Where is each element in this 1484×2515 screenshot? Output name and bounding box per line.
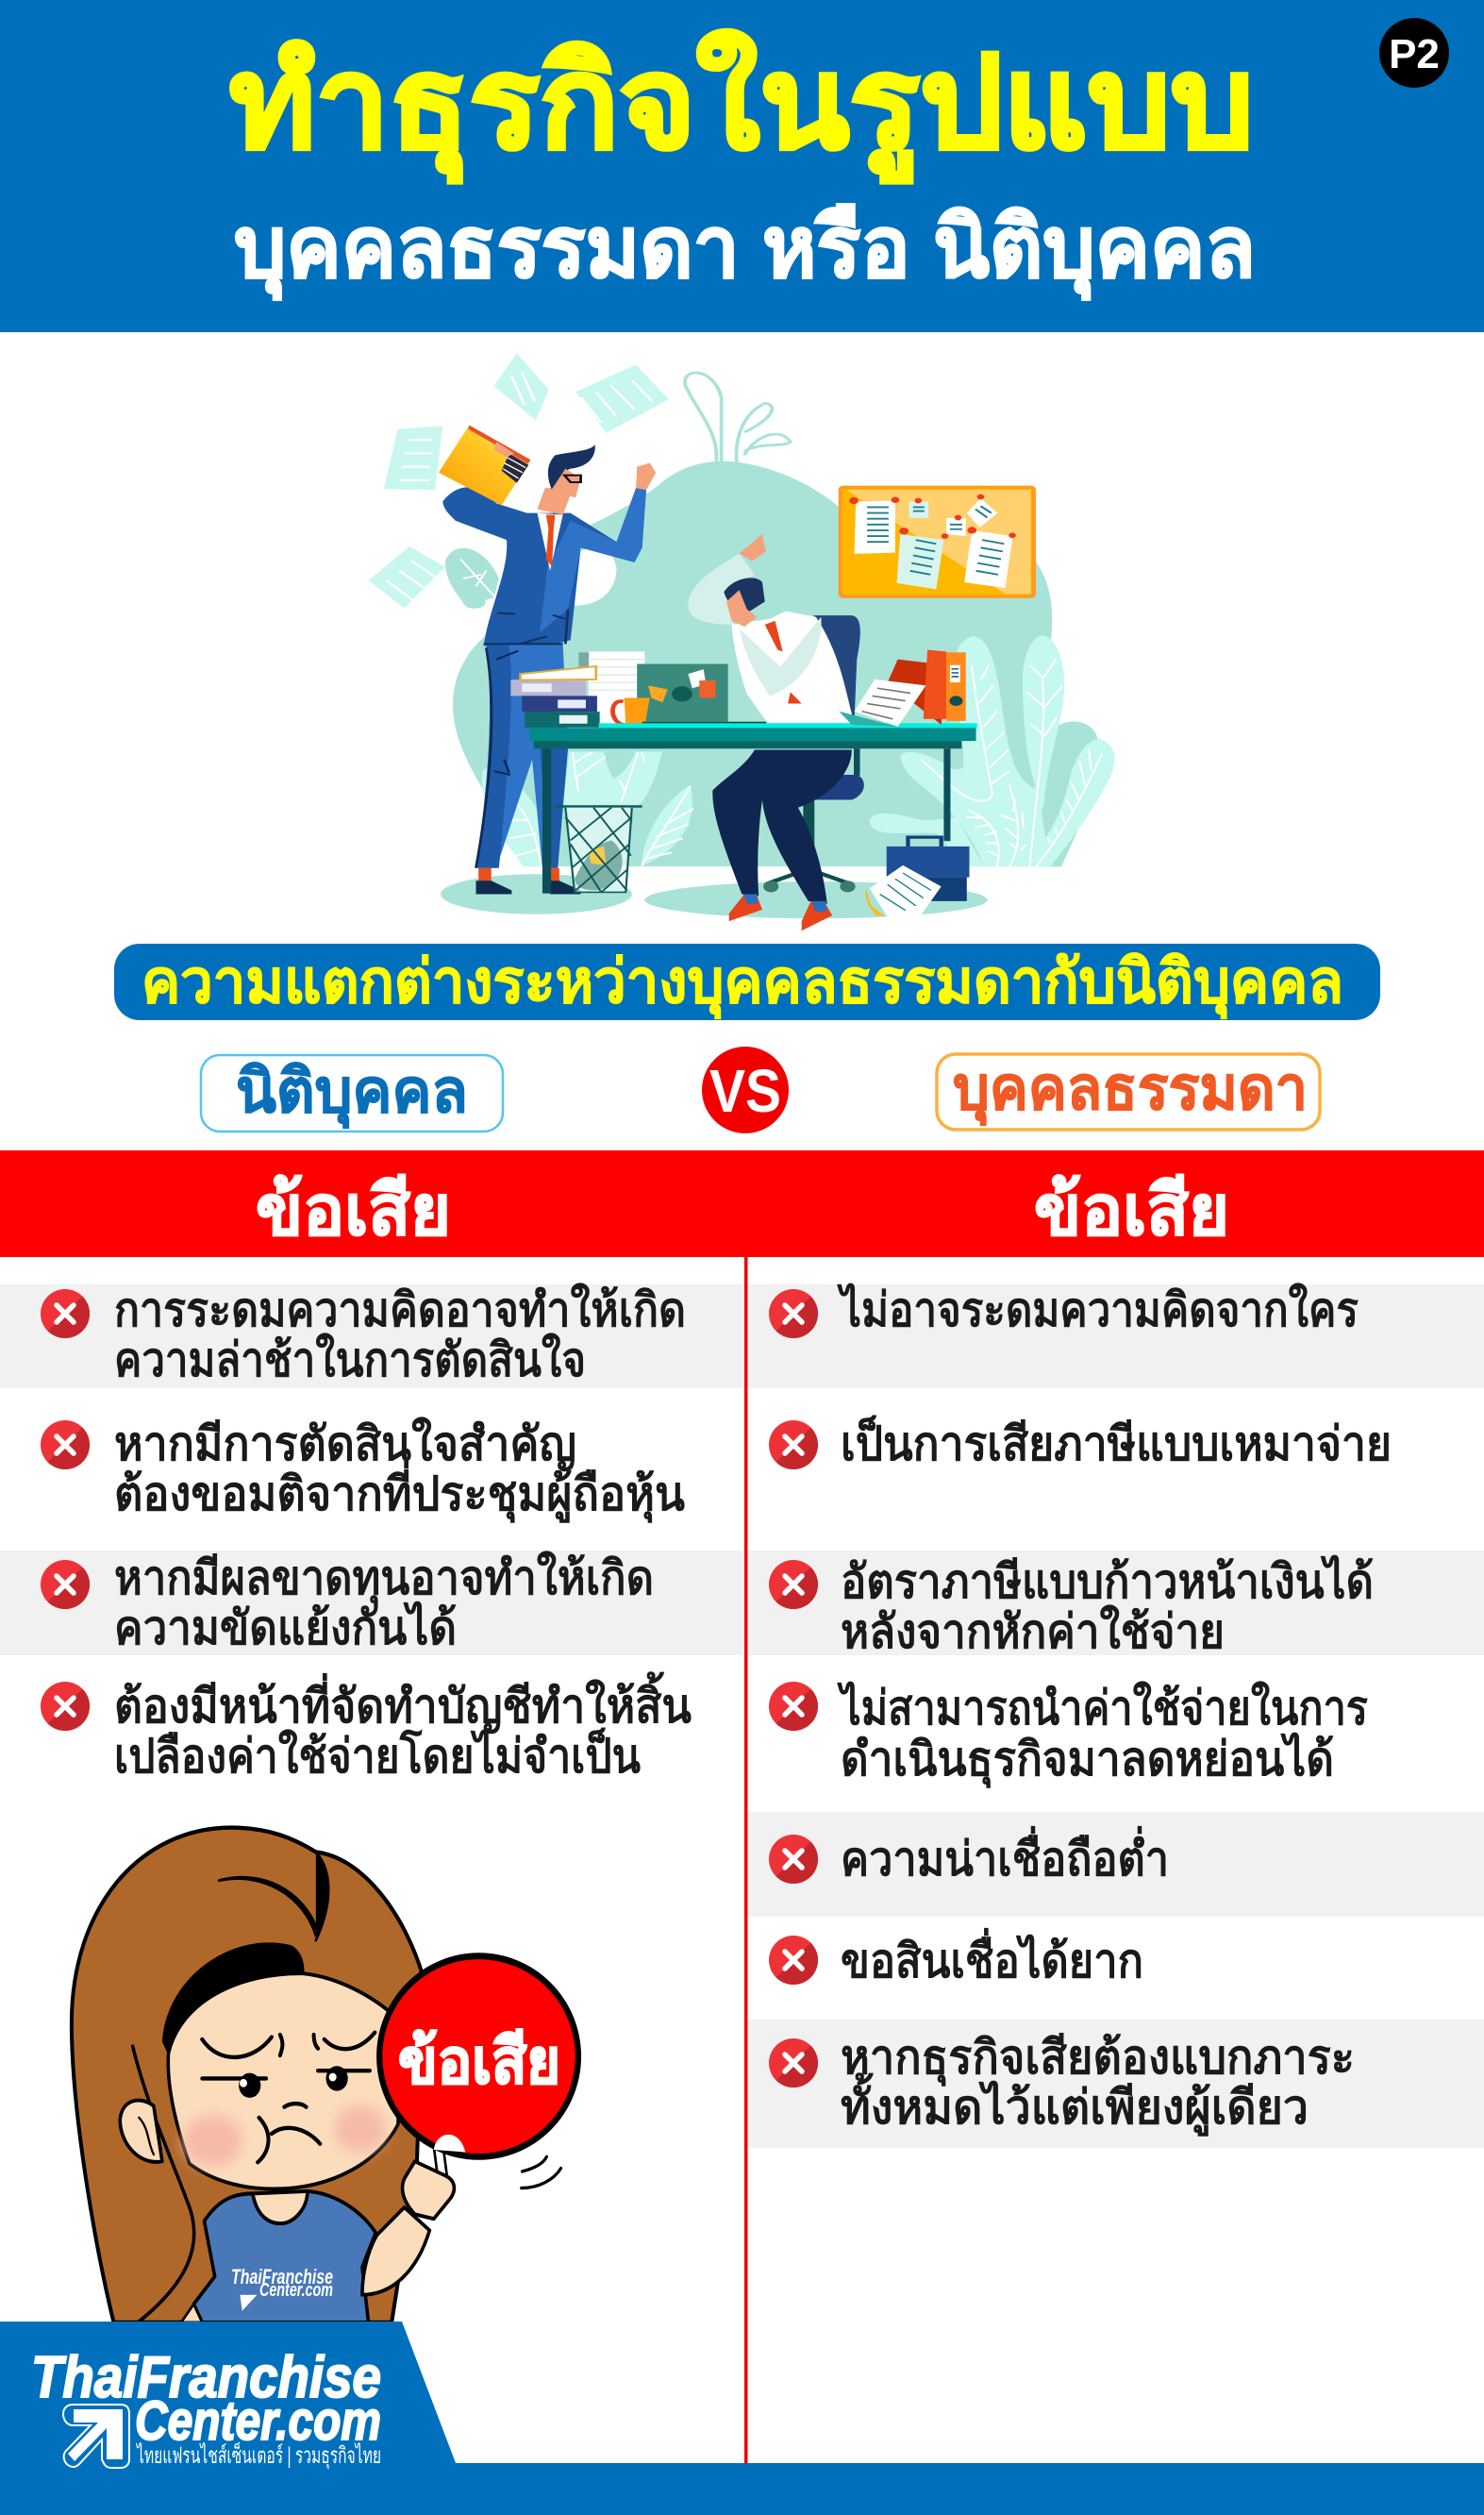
left row 4: ต้องมีหน้าที่จัดทำบัญชีทำให้สิ้น [114, 1671, 692, 1734]
section heading pill: ความแตกต่างระหว่างบุคคลธรรมดากับนิติบุคคล [142, 947, 1343, 1019]
left row 2 [41, 1417, 685, 1523]
open folders and paper [839, 649, 966, 727]
background blob [453, 461, 1061, 866]
left label: นิติบุคคล: นิติบุคคล [236, 1057, 468, 1129]
waste basket [555, 806, 642, 892]
right row 5: ความน่าเชื่อถือต่ำ [841, 1826, 1169, 1886]
desk items [510, 651, 766, 728]
right row 4: ไม่สามารถนำค่าใช้จ่ายในการ [837, 1681, 1368, 1735]
right row 5 [769, 1826, 1169, 1886]
mascot: girl holding sign [72, 1828, 578, 2322]
centre divider [744, 1257, 747, 2463]
left row 3: ความขัดแย้งกันได้ [114, 1601, 457, 1654]
seated man's chair [763, 615, 864, 892]
right row 7 [769, 2031, 1355, 2137]
title: ทำธุรกิจในรูปแบบ [229, 29, 1254, 183]
briefcase [866, 837, 970, 917]
right row 2: เป็นการเสียภาษีแบบเหมาจ่าย [841, 1415, 1392, 1470]
papers [369, 353, 669, 608]
right row 4 [769, 1681, 1368, 1788]
red header band [0, 1150, 1484, 1257]
logo wordmark: ThaiFranchise [31, 2345, 381, 2410]
VS badge: VS [709, 1057, 781, 1125]
left row 4 [41, 1671, 692, 1783]
mascot: girl holding sign: Center.com [259, 2280, 333, 2301]
right row 7: หากธุรกิจเสียต้องแบกภาระ [841, 2031, 1355, 2087]
right row 3: หลังจากหักค่าใช้จ่าย [841, 1604, 1225, 1658]
page badge P2 [1379, 18, 1449, 88]
left row 2: ต้องขอมติจากที่ประชุมผู้ถือหุ้น [114, 1461, 685, 1523]
right row 3 [769, 1554, 1374, 1658]
heading right: ข้อเสีย [1034, 1171, 1229, 1249]
left row 1: ความล่าช้าในการตัดสินใจ [114, 1333, 586, 1386]
left row 4: เปลืองค่าใช้จ่ายโดยไม่จำเป็น [114, 1727, 641, 1783]
footer band with logo tab: Center.com [135, 2390, 381, 2452]
sprouts [685, 373, 791, 463]
left row 2: หากมีการตัดสินใจสำคัญ [114, 1417, 576, 1471]
footer band with logo tab [0, 2322, 1484, 2515]
page badge P2: P2 [1389, 31, 1440, 77]
right row 3: อัตราภาษีแบบก้าวหน้าเงินได้ [841, 1554, 1374, 1608]
desk [529, 723, 977, 894]
plants left [482, 752, 693, 866]
right row 7: ทั้งหมดไว้แต่เพียงผู้เดียว [841, 2072, 1309, 2137]
folder [439, 426, 530, 505]
header band [0, 0, 1484, 332]
plants right [870, 635, 1115, 866]
footer band with logo tab: ไทยแฟรนไชส์เซ็นเตอร์ | รวมธุรกิจไทย [136, 2441, 381, 2470]
right row 6 [769, 1928, 1143, 1987]
grey row bands [0, 1284, 1484, 2148]
heading left: ข้อเสีย [256, 1171, 451, 1249]
left row 3 [41, 1551, 654, 1654]
right row 1: ไม่อาจระดมความคิดจากใคร [837, 1283, 1359, 1336]
right row 4: ดำเนินธุรกิจมาลดหย่อนได้ [841, 1732, 1334, 1788]
icon: logo arrow [63, 2405, 129, 2468]
right row 6: ขอสินเชื่อได้ยาก [841, 1928, 1143, 1987]
subtitle: บุคคลธรรมดา หรือ นิติบุคคล [234, 201, 1256, 301]
pin board [841, 487, 1034, 596]
shirt logo: ThaiFranchise [231, 2265, 333, 2289]
left row 1: การระดมความคิดอาจทำให้เกิด [114, 1283, 686, 1336]
sign text: ข้อเสีย [398, 2026, 560, 2096]
left row 1 [41, 1283, 686, 1386]
small leaf left [445, 548, 499, 609]
seated man [712, 534, 855, 931]
right label: บุคคลธรรมดา: บุคคลธรรมดา [953, 1054, 1308, 1126]
left label: นิติบุคคล [201, 1055, 503, 1132]
floor ellipses [441, 874, 987, 918]
illustration: office argument [369, 353, 1115, 931]
left row 3: หากมีผลขาดทุนอาจทำให้เกิด [114, 1551, 654, 1607]
standing man [439, 426, 656, 895]
